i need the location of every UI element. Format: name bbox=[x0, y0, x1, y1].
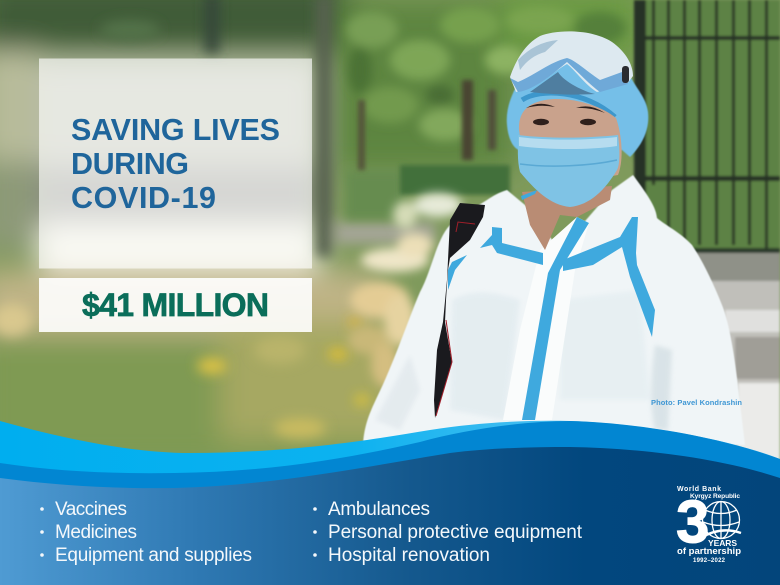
suit body bbox=[363, 175, 745, 445]
list: left column: Equipment and supplies bbox=[55, 545, 252, 566]
logo: World Bank 30 years of partnership: of partnership bbox=[677, 546, 741, 557]
list: right column: Ambulances bbox=[328, 499, 430, 520]
hair cap bbox=[507, 60, 648, 157]
background: fence and pavement bbox=[634, 0, 780, 481]
background: flowers bbox=[348, 193, 462, 387]
list: left column: Medicines bbox=[55, 522, 137, 543]
wave: mid blue band bbox=[0, 421, 780, 500]
funding amount panel bbox=[39, 278, 312, 332]
logo: World Bank 30 years of partnership: Kyrgyz Republic bbox=[690, 493, 740, 500]
list: right column: Personal protective equipment bbox=[328, 522, 583, 543]
background: tree trunks bbox=[358, 80, 510, 195]
title bbox=[71, 113, 280, 215]
figure: worker in white suit bbox=[363, 31, 745, 445]
title: COVID-19 bbox=[71, 181, 216, 215]
list: left column: Vaccines bbox=[55, 499, 127, 520]
backpack strap bbox=[434, 203, 485, 418]
amount: $41 MILLION bbox=[82, 287, 269, 323]
list: right column: Hospital renovation bbox=[328, 545, 490, 566]
safety goggles bbox=[510, 31, 633, 92]
neck bbox=[522, 186, 612, 250]
suit shading bbox=[375, 290, 672, 430]
title: DURING bbox=[71, 147, 189, 181]
list: left column bbox=[40, 499, 252, 566]
logo: World Bank 30 years of partnership: 1992–2022 bbox=[693, 558, 726, 564]
eyes and brows bbox=[526, 104, 605, 125]
wave: dark gradient panel bbox=[0, 447, 780, 585]
translucent title panel bbox=[39, 58, 312, 268]
logo: World Bank 30 years of partnership: YEARS bbox=[708, 538, 737, 548]
logo: globe bbox=[701, 502, 741, 538]
wave: bottom banner bbox=[0, 421, 780, 585]
background: foliage bbox=[345, 6, 652, 220]
head bbox=[507, 31, 648, 207]
surgical mask bbox=[518, 135, 619, 207]
logo: World Bank 30 years of partnership bbox=[676, 486, 741, 564]
logo: World Bank 30 years of partnership: World Bank bbox=[677, 486, 721, 493]
cap band bbox=[522, 93, 615, 117]
logo: World Bank 30 years of partnership: 3 bbox=[676, 488, 709, 556]
face bbox=[519, 99, 622, 185]
photo credit: Photo: Pavel Kondrashin bbox=[651, 398, 742, 407]
blue tape bbox=[448, 190, 655, 420]
title: SAVING LIVES bbox=[71, 113, 280, 147]
list: right column bbox=[313, 499, 583, 566]
wave: cyan band bbox=[0, 421, 780, 500]
placket bbox=[503, 217, 589, 420]
